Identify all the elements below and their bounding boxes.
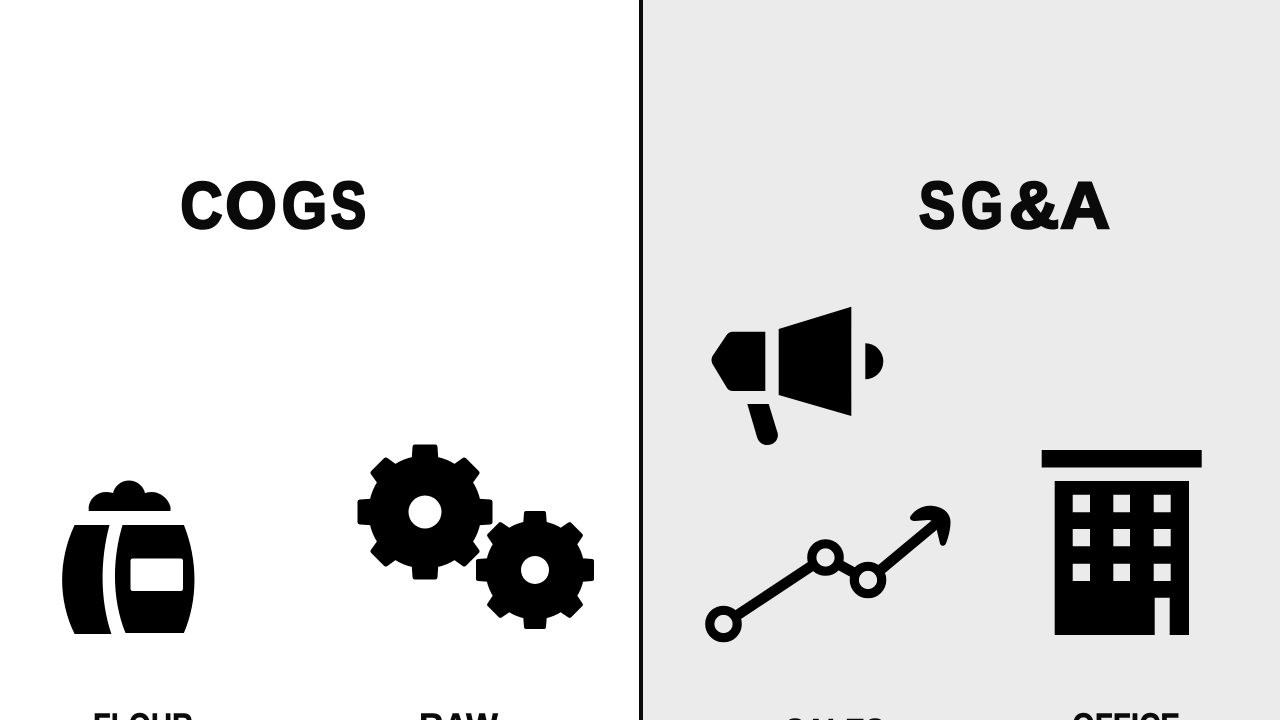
panel: SG&A	[640, 0, 1280, 720]
heading: SG&A: G	[961, 168, 1003, 242]
heading: SG&A	[919, 168, 1110, 243]
heading: COGS	[181, 168, 366, 243]
icon: office building	[1042, 450, 1202, 635]
heading: COGS: C	[181, 170, 222, 243]
icon: megaphone	[712, 307, 883, 445]
icon: flour bag	[62, 481, 194, 634]
icon: sales trend line	[710, 506, 950, 638]
heading: SG&A: A	[1060, 169, 1110, 243]
heading: SG&A: &	[1009, 169, 1059, 243]
small gear	[476, 511, 594, 629]
heading: COGS: G	[282, 170, 327, 243]
large gear	[358, 444, 492, 580]
icon: raw material gears	[358, 444, 594, 629]
center divider	[639, 0, 643, 720]
panel: COGS	[0, 0, 640, 720]
heading: COGS: S	[331, 168, 366, 242]
heading: SG&A: S	[919, 168, 955, 242]
heading: COGS: O	[225, 168, 277, 242]
